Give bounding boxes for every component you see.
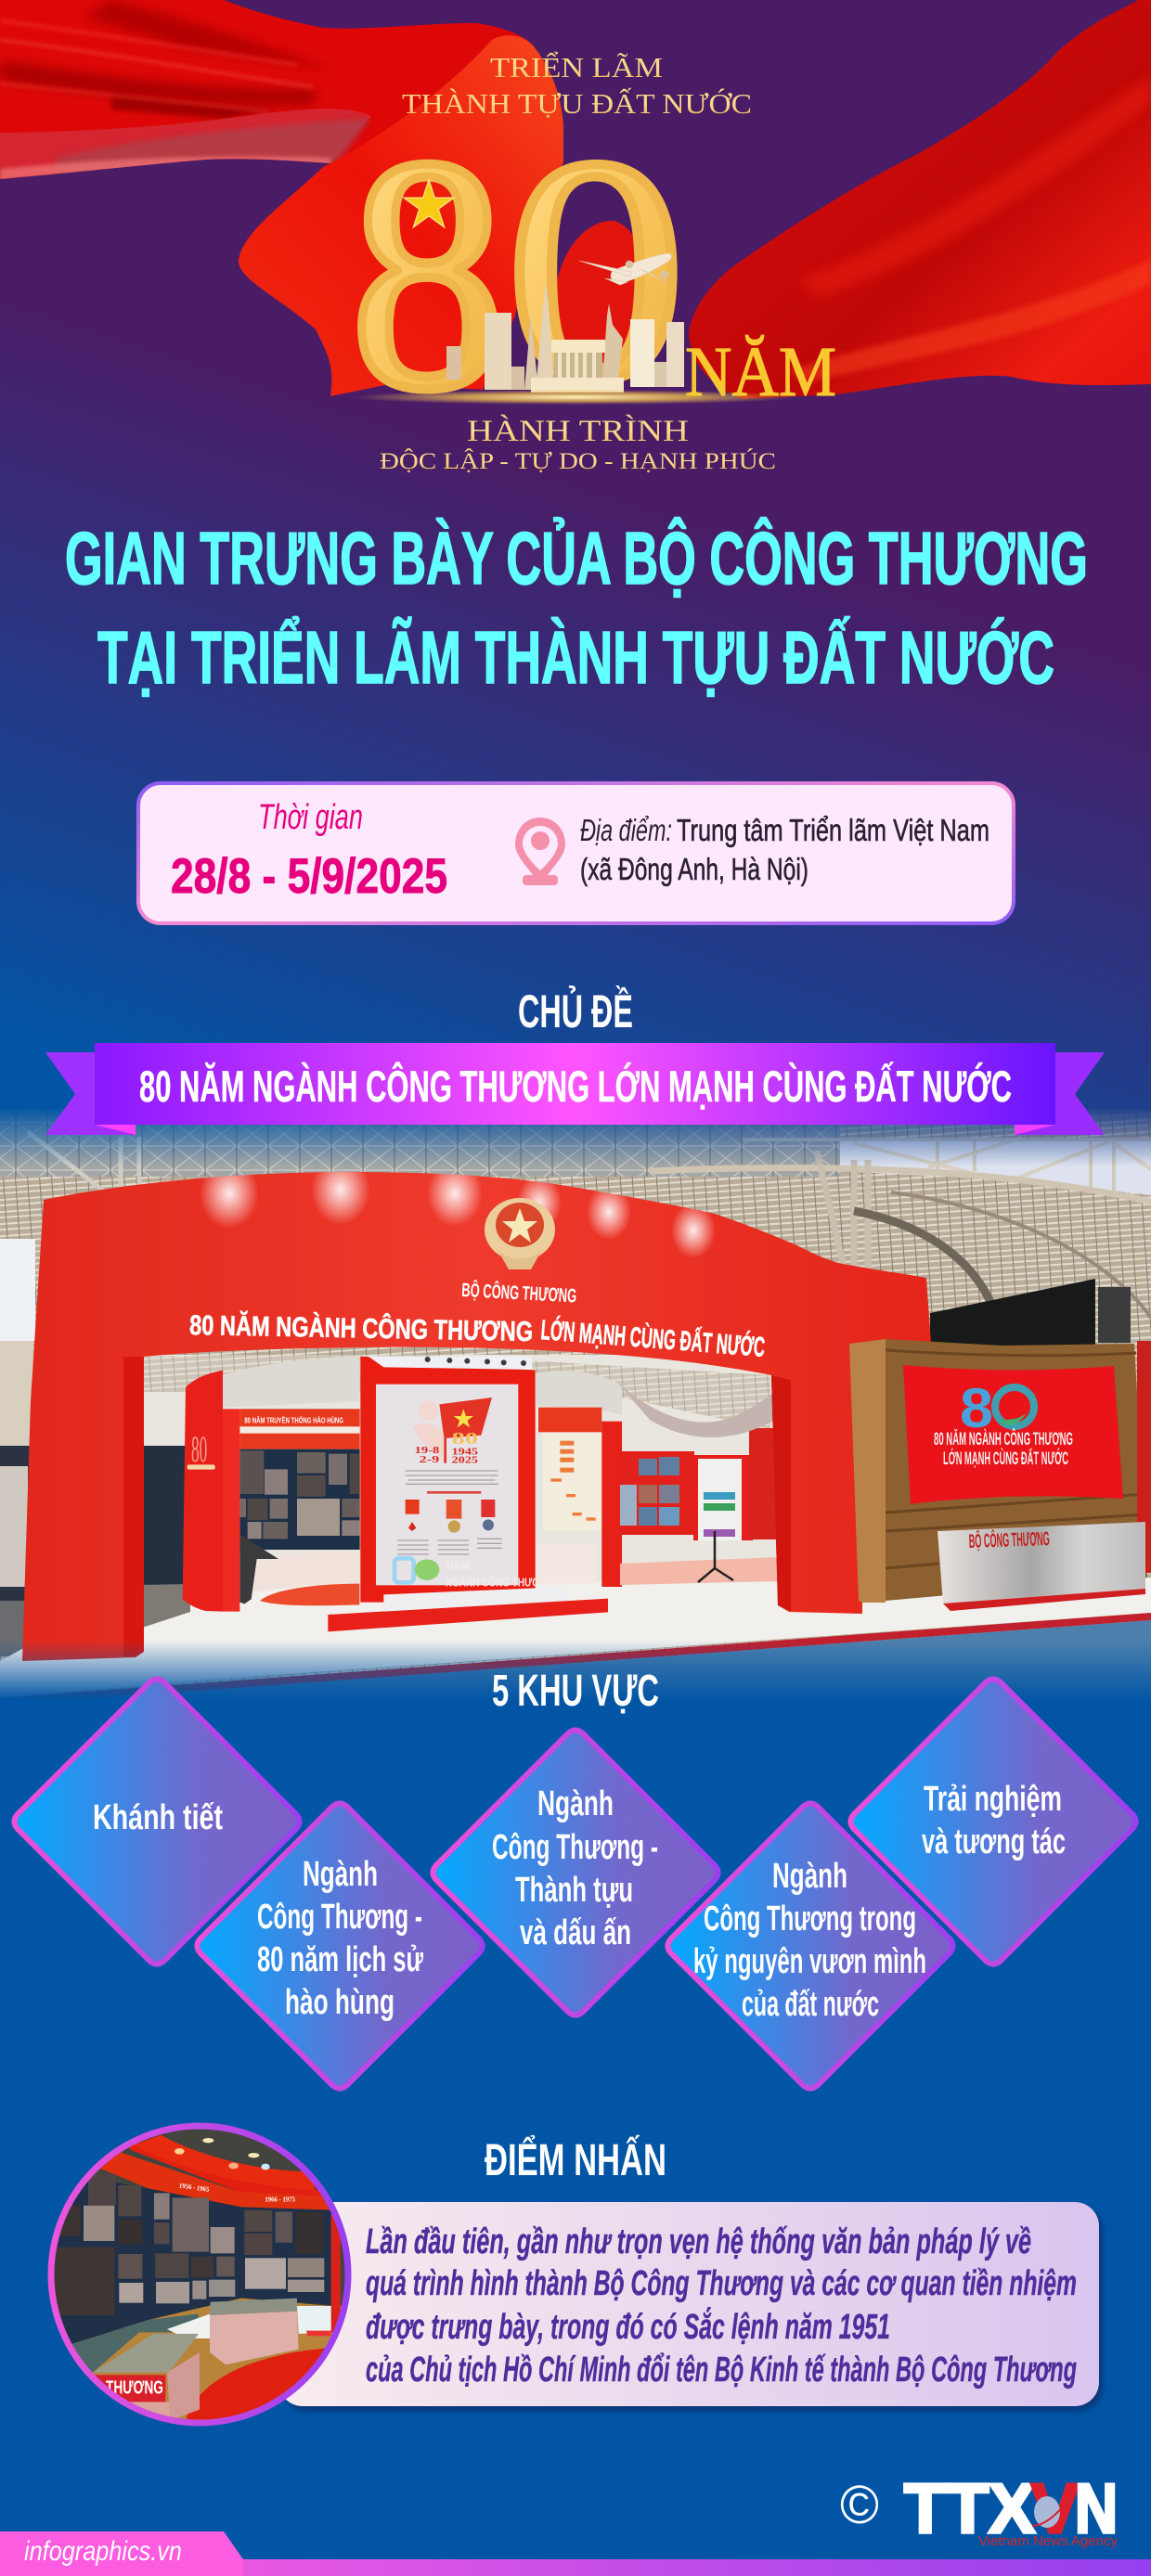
hero: exhibition title in gold: THÀNH TỰU ĐẤT NƯỚC: [402, 87, 752, 120]
glowing logo on platform: NĂM: [446, 1559, 471, 1573]
ribbon: upper left: [0, 0, 534, 181]
booth front arch: [22, 1154, 931, 1661]
floor and glass: [37, 2299, 346, 2441]
national emblem: [485, 1198, 555, 1269]
logo wordmark: N: [1075, 2469, 1118, 2547]
icon: airplane: [579, 253, 671, 285]
number 80: 8: [350, 89, 505, 459]
photo: round gallery view: [37, 2116, 362, 2441]
platform: [328, 1599, 608, 1631]
zone 2: Ngành: [303, 1855, 378, 1894]
number 80: 0: [506, 93, 686, 447]
location text: (xã Đông Anh, Hà Nội): [580, 852, 808, 886]
poster: 2-9: [420, 1455, 439, 1465]
zone 1: Khánh tiết: [93, 1798, 223, 1837]
hero: journey tagline: [380, 414, 776, 474]
right round section: [536, 1371, 622, 1415]
note text: [366, 2222, 1077, 2389]
medals: [406, 1500, 495, 1533]
wood display wall: [849, 1339, 1151, 1611]
booth sign: slogan: 80 NĂM NGÀNH CÔNG THƯƠNG: [189, 1309, 533, 1347]
roof truss: [0, 1104, 1151, 1707]
ribbon: right: [689, 0, 1151, 399]
screen logo: 8: [960, 1377, 993, 1439]
booth interior backdrop: [139, 1355, 780, 1587]
booth sign: ministry name: BỘ CÔNG THƯƠNG: [461, 1279, 577, 1307]
ribbon: behind zero: [552, 221, 640, 376]
icon: location pin: [515, 818, 565, 885]
hero: journey tagline: HÀNH TRÌNH: [467, 414, 689, 448]
number 80: [350, 89, 686, 459]
zone 4: kỷ nguyên vươn mình: [693, 1942, 926, 1981]
zone 5: và tương tác: [922, 1823, 1066, 1861]
agency name: Vietnam News Agency: [978, 2533, 1118, 2549]
photo: exhibition booth: [0, 1104, 1151, 1707]
zone 4: Ngành: [772, 1857, 847, 1896]
red floor round: [260, 1584, 359, 1605]
ribbon band: [95, 1043, 1055, 1125]
location text: [580, 813, 989, 886]
interior exhibits: 80 NĂM TRUYỀN THỐNG HÀO HÙNG: [244, 1415, 343, 1424]
rear display case: [210, 2299, 299, 2364]
illustration: city skyline and mausoleum: [446, 281, 684, 393]
zone 5: [850, 1680, 1136, 1964]
red ceiling band: [130, 2144, 346, 2209]
zone 1: [15, 1680, 299, 1964]
booth sign: slogan: [189, 1309, 766, 1363]
booth sign: slogan: LỚN MẠNH CÙNG ĐẤT NƯỚC: [539, 1314, 766, 1363]
zone 3: và dấu ấn: [520, 1913, 631, 1952]
logo wordmark: V: [1031, 2469, 1079, 2547]
logo wordmark: TTX: [904, 2469, 1035, 2547]
navy panels: [37, 2169, 331, 2346]
panel date labels: 1956 - 1965: [178, 2181, 210, 2194]
hero: journey tagline: ĐỘC LẬP - TỰ DO - HẠNH PHÚC: [380, 448, 776, 474]
newspaper sign: THƯƠNG: [106, 2376, 163, 2398]
glow under skyline: [353, 390, 798, 405]
hero: NĂM label: NĂM: [685, 333, 836, 411]
zone 4: của đất nước: [742, 1985, 879, 2024]
steel counter: [938, 1522, 1145, 1604]
heading: theme: CHỦ ĐỀ: [518, 985, 633, 1037]
icon: globe: [1032, 2489, 1074, 2528]
right gallery wall: [617, 1383, 778, 1585]
date: 28/8 - 5/9/2025: [171, 849, 447, 904]
red floor: [186, 2348, 346, 2441]
black and white photos: [53, 2174, 324, 2315]
left side wall: [0, 1239, 35, 1656]
panel date labels: [178, 2181, 295, 2204]
panel: time and location: [138, 783, 1014, 923]
zone 3: [433, 1730, 718, 2016]
footer bar: [0, 2531, 1151, 2576]
zone 5: Trải nghiệm: [924, 1780, 1062, 1819]
ribbon: centre: [239, 35, 563, 396]
logo wordmark: [904, 2469, 1118, 2547]
zone 3: Công Thương -: [492, 1828, 658, 1867]
interior truss view: [143, 1351, 770, 1429]
red screen: [903, 1365, 1123, 1504]
zone 4: Công Thương trong: [704, 1900, 916, 1938]
zone 2: 80 năm lịch sử: [257, 1940, 423, 1979]
floor: [0, 1578, 1151, 1707]
black LED wall: [930, 1279, 1131, 1347]
hero: exhibition title in gold: [402, 51, 752, 120]
panel date labels: 1966 - 1975: [265, 2196, 295, 2204]
panel: highlight note: [278, 2202, 1103, 2411]
poster: 2025: [452, 1456, 478, 1466]
footer: copyright and TTXVN logo: [840, 2469, 1118, 2549]
location text: Địa điểm:: [580, 813, 672, 847]
note text: được trưng bày, trong đó có Sắc lệnh năm 1951: [366, 2306, 890, 2347]
zone 2: [197, 1804, 483, 2088]
pillar logo: 80: [191, 1428, 207, 1470]
round pillar: [183, 1371, 223, 1612]
pillar logo: [188, 1436, 215, 1470]
icon: star: [404, 180, 454, 227]
banner: theme ribbon: [45, 1043, 1105, 1135]
screen text: [934, 1429, 1073, 1469]
hero: red silk ribbons: [0, 0, 1151, 399]
front display case: [86, 2334, 200, 2425]
centre panel: [360, 1357, 536, 1603]
copyright symbol: ©: [840, 2475, 879, 2535]
screen logo: [960, 1377, 1036, 1439]
glowing logo on platform: [394, 1558, 554, 1589]
site name: infographics.vn: [24, 2536, 182, 2567]
zone 2: Công Thương -: [257, 1898, 422, 1937]
spotlights on arch: [200, 1154, 716, 1258]
glowing logo on platform: NGÀNH CÔNG THƯƠNG: [446, 1575, 554, 1589]
dark arch exhibit behind: [144, 1446, 186, 1585]
zone 3: Ngành: [537, 1784, 614, 1823]
red frieze: [239, 1409, 360, 1449]
zone 3: Thành tựu: [515, 1871, 633, 1910]
poster: 19-8: [415, 1446, 439, 1456]
zone 4: [668, 1804, 952, 2088]
main heading: [65, 517, 1088, 699]
zone 2: hào hùng: [285, 1983, 394, 2022]
heading: highlight: ĐIỂM NHẤN: [485, 2135, 666, 2185]
counter: [251, 1552, 359, 1593]
location text: Trung tâm Triển lãm Việt Nam: [677, 813, 989, 847]
spotlights row: [425, 1357, 526, 1366]
hero: exhibition title in gold: TRIỂN LÃM: [490, 51, 663, 84]
time label: Thời gian: [258, 798, 363, 837]
photo wall: [239, 1449, 360, 1550]
newspaper sign: [93, 2375, 165, 2402]
heading: five zones: 5 KHU VỰC: [492, 1667, 659, 1716]
hero: gold 80 logo: [350, 89, 798, 459]
kiosk: [239, 1534, 278, 1604]
interior exhibits: [183, 1357, 622, 1631]
poster: [376, 1385, 518, 1585]
wood display wall: BỘ CÔNG THƯƠNG: [968, 1527, 1050, 1552]
poster: 1945: [452, 1447, 478, 1457]
zones: diamonds: [15, 1680, 1136, 2088]
footer tab: [0, 2531, 243, 2576]
poster: 80: [452, 1429, 478, 1448]
white header: [223, 1357, 359, 1408]
ribbon tails: [45, 1052, 1105, 1135]
